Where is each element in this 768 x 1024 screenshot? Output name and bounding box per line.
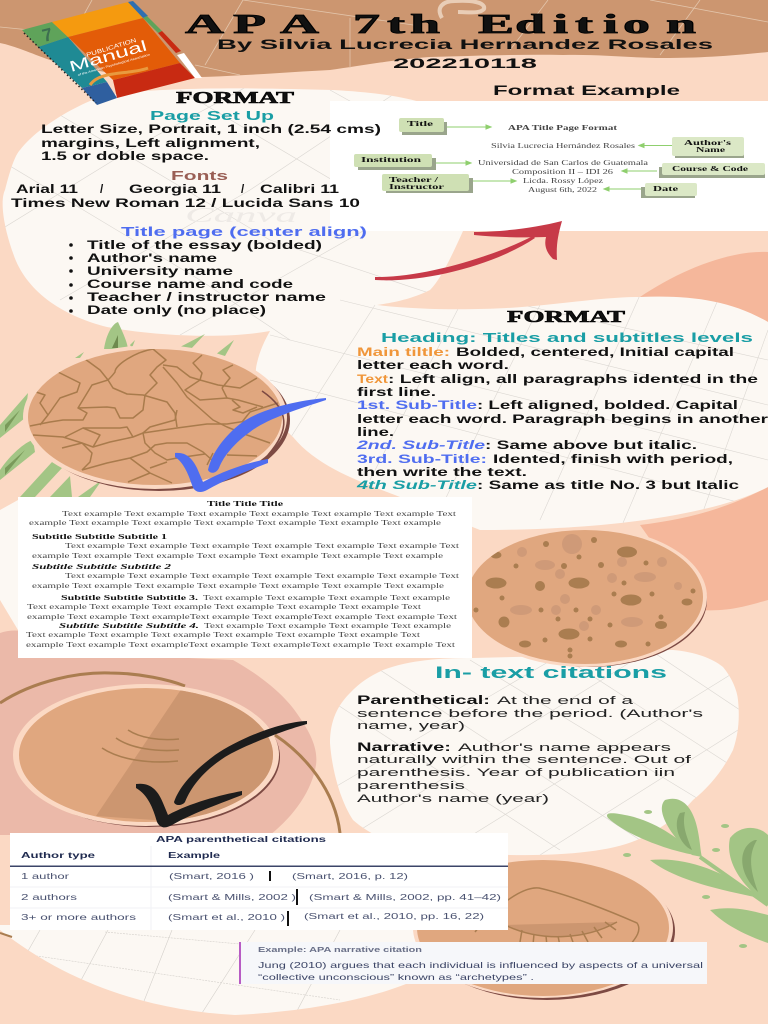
panel: sample paper format: example Text example Text exampleText example Text exampleText example Text example Text bbox=[26, 640, 456, 649]
pink shape lower left bbox=[0, 630, 316, 835]
heading: title page: Title page (center align) bbox=[121, 225, 367, 239]
text: page set up: Letter Size, Portrait, 1 inch (2.54 cms) bbox=[41, 123, 381, 136]
heading: in-text citations: In- text citations bbox=[435, 663, 667, 682]
text: first subtitle: letter each word. Paragraph begins in another bbox=[357, 413, 768, 426]
text: page set up bbox=[41, 123, 381, 163]
table: APA parenthetical citations: (Smart et al., 2010, pp. 16, 22) bbox=[304, 911, 484, 921]
leaves behind cracked disc bbox=[0, 322, 234, 497]
tag: title bbox=[399, 118, 447, 135]
callout: APA narrative citation: Jung (2010) argues that each individual is influenced by aspects of a universal bbox=[258, 960, 703, 970]
panel: sample paper format: example Text example Text example Text example Text example Text example Text example bbox=[32, 581, 445, 590]
table: APA parenthetical citations: (Smart et al., 2010 ) bbox=[168, 912, 285, 922]
text: main title: Bolded, centered, Initial capital bbox=[456, 346, 734, 359]
text: parenthetical bbox=[357, 694, 704, 732]
tag: course and code bbox=[659, 163, 765, 178]
text: page set up: margins, Left alignment, bbox=[41, 137, 260, 150]
text: fourth subtitle: 4th Sub-Title bbox=[355, 479, 478, 492]
text: first subtitle bbox=[357, 399, 768, 439]
panel: sample paper format: Subtitle Subtitle Subtitle 2 bbox=[32, 562, 172, 571]
brown curve behind lower disc bbox=[0, 673, 340, 833]
text: fonts: Arial 11 bbox=[16, 183, 79, 196]
tag: course and code: Course & Code bbox=[672, 166, 748, 173]
table: APA parenthetical citations: (Smart & Mills, 2002 ) bbox=[168, 892, 296, 902]
tag: teacher / instructor: Teacher / bbox=[389, 177, 438, 184]
disc: dotted texture bbox=[463, 527, 707, 667]
text: fonts: Times New Roman 12 / Lucida Sans 10 bbox=[11, 197, 360, 210]
panel: sample paper format: Text example Text example Text example Text example Text example Text example Text bbox=[65, 541, 460, 550]
watermark: Canva bbox=[185, 203, 297, 227]
text: fonts: / bbox=[100, 183, 104, 196]
disc: lower left bbox=[13, 684, 300, 830]
panel: sample paper format: Text example Text example Text example Text example Text example Text example Text bbox=[27, 602, 422, 611]
text: narrative: Author's name (year) bbox=[357, 793, 550, 805]
cream blob in-text citations bbox=[330, 650, 740, 855]
text: fonts: / bbox=[241, 183, 245, 196]
text: narrative: parenthesis bbox=[357, 780, 466, 792]
callout: APA narrative citation: Example: APA narrative citation bbox=[258, 945, 423, 954]
text: first subtitle: line. bbox=[357, 426, 394, 439]
heading: titles and subtitles levels: Heading: Titles and subtitles levels bbox=[381, 330, 753, 345]
heading: fonts: Fonts bbox=[171, 169, 228, 183]
text: parenthetical: At the end of a bbox=[497, 695, 634, 707]
text: narrative bbox=[357, 741, 693, 805]
text: body text bbox=[357, 373, 759, 399]
panel: sample paper format: example Text example Text example Text example Text example Text example Text example bbox=[32, 551, 444, 560]
sample title page text: Licda. Rossy López bbox=[523, 177, 603, 185]
format example heading: Format Example bbox=[493, 83, 681, 98]
panel: sample paper format: Title Title Title bbox=[207, 499, 284, 508]
tag: author's name bbox=[672, 137, 744, 158]
text: narrative: parenthesis. Year of publication iin bbox=[357, 767, 675, 779]
tag: date: Date bbox=[653, 186, 678, 193]
text: third subtitle: Idented, finish with period, bbox=[493, 453, 733, 466]
panel: format right bbox=[355, 307, 768, 492]
cream blob lower bbox=[0, 925, 416, 1015]
tag: author's name: Name bbox=[696, 147, 725, 154]
bullet list: title page: Teacher / instructor name bbox=[87, 291, 327, 304]
top brown band bbox=[0, 0, 768, 78]
text: fonts: Calibri 11 bbox=[260, 183, 340, 196]
text: second subtitle: 2nd. Sub-Title bbox=[355, 439, 486, 452]
cream blob upper bbox=[0, 85, 768, 530]
heading: format: FORMAT bbox=[176, 88, 295, 107]
sample title page text bbox=[478, 124, 649, 194]
table: APA parenthetical citations: (Smart, 2016, p. 12) bbox=[292, 871, 408, 881]
disc: cracked earth bbox=[23, 345, 290, 491]
tag: title: Title bbox=[407, 121, 433, 128]
panel: sample paper format: Subtitle Subtitle Subtitle 1 bbox=[32, 532, 167, 541]
icon: APA publication manual book: Manual bbox=[67, 37, 149, 76]
table: APA parenthetical citations: (Smart, 2016 ) bbox=[169, 871, 254, 881]
table: APA parenthetical citations: Author type bbox=[21, 850, 95, 860]
callout: APA narrative citation bbox=[239, 942, 707, 984]
table: APA parenthetical citations: Example bbox=[168, 850, 220, 860]
sample title page text: Universidad de San Carlos de Guatemala bbox=[478, 159, 649, 167]
panel: sample paper format: Subtitle Subtitle Subtitle 4. bbox=[59, 621, 199, 630]
brown mark at lower left bbox=[0, 933, 12, 937]
bullet list: title page: Title of the essay (bolded) bbox=[87, 239, 322, 252]
panel: sample paper format: Text example Text example Text example Text example bbox=[203, 593, 451, 602]
black check mark bbox=[136, 721, 307, 827]
icon: APA publication manual book bbox=[22, 1, 202, 105]
arrows bbox=[436, 125, 672, 191]
panel: sample paper format: example Text example Text example Text example Text example Text example Text example bbox=[29, 518, 442, 527]
text: body text: : Left align, all paragraphs idented in the bbox=[388, 373, 759, 386]
text: third subtitle: 3rd. Sub-Title: bbox=[357, 453, 487, 466]
bullet list: title page: Author's name bbox=[87, 252, 218, 265]
bullet list: title page: Date only (no place) bbox=[87, 304, 266, 317]
red arrow bbox=[375, 221, 562, 280]
author name: By Silvia Lucrecia Hernandez Rosales bbox=[217, 36, 713, 52]
panel: sample paper format: Text example Text example Text example Text example bbox=[204, 621, 452, 630]
text: page set up: 1.5 or doble space. bbox=[41, 150, 209, 163]
icon: APA publication manual book: of the American Psychological Association bbox=[77, 52, 151, 77]
text: narrative: Narrative: bbox=[357, 741, 451, 754]
panel: format left bbox=[11, 88, 381, 317]
text: second subtitle: : Same above but italic. bbox=[485, 439, 697, 452]
bullet list: title page: Course name and code bbox=[87, 278, 294, 291]
table: APA parenthetical citations: 3+ or more authors bbox=[21, 912, 136, 922]
tag: author's name: Author's bbox=[684, 140, 732, 147]
table: APA parenthetical citations: (Smart & Mills, 2002, pp. 41–42) bbox=[309, 892, 501, 902]
panel: sample paper format: Text example Text example Text example Text example Text example Text example Text bbox=[26, 630, 421, 639]
sample title page text: APA Title Page Format bbox=[508, 124, 618, 132]
salmon shape right bbox=[640, 487, 768, 610]
heading: format: FORMAT bbox=[507, 307, 626, 326]
panel: sample paper format: Subtitle Subtitle Subtitle 3. bbox=[61, 593, 198, 602]
text: fonts bbox=[11, 183, 360, 210]
panel: sample paper format: Text example Text example Text example Text example Text example Text example Text bbox=[62, 509, 457, 518]
salmon shape top right bbox=[640, 252, 768, 322]
text: first subtitle: 1st. Sub-Title bbox=[357, 399, 478, 412]
bullet list: title page: University name bbox=[87, 265, 234, 278]
text: third subtitle: then write the text. bbox=[357, 466, 527, 479]
sample title page text: Silvia Lucrecia Hernández Rosales bbox=[491, 142, 635, 150]
leaves bottom right bbox=[607, 799, 768, 948]
disc: lower right with eye bbox=[413, 858, 675, 1000]
cream sliver left edge bbox=[0, 500, 18, 630]
icon: APA publication manual book: PUBLICATION bbox=[86, 38, 137, 59]
tag: institution: Institution bbox=[361, 157, 421, 164]
table: APA parenthetical citations: APA parenthetical citations bbox=[156, 834, 326, 844]
text: third subtitle bbox=[357, 453, 733, 479]
panel: sample paper format bbox=[18, 497, 472, 658]
text: main title bbox=[357, 346, 734, 372]
table: APA parenthetical citations: 1 author bbox=[21, 871, 69, 881]
tag: institution bbox=[354, 154, 436, 170]
icon: APA publication manual book: 7 bbox=[40, 24, 55, 46]
tag: teacher / instructor: Instructor bbox=[389, 184, 444, 191]
text: first subtitle: : Left aligned, bolded. Capital bbox=[477, 399, 738, 412]
text: body text: Text bbox=[357, 373, 388, 386]
table: APA parenthetical citations: 2 authors bbox=[21, 892, 77, 902]
text: body text: first line. bbox=[357, 386, 436, 399]
tag: date bbox=[641, 183, 697, 198]
title: APA 7th Edition bbox=[185, 10, 696, 39]
panel: sample paper format: Text example Text example Text example Text example Text example Text example Text bbox=[65, 571, 460, 580]
blue check mark bbox=[175, 398, 326, 492]
text: narrative: Author's name appears bbox=[458, 742, 672, 754]
text: fourth subtitle: : Same as title No. 3 but Italic bbox=[477, 479, 740, 492]
callout: APA narrative citation: “collective unconscious” known as “archetypes” . bbox=[258, 972, 534, 982]
text: main title: letter each word. bbox=[357, 359, 509, 372]
panel: in-text citations bbox=[357, 663, 704, 805]
heading: page set up: Page Set Up bbox=[150, 109, 275, 123]
text: main title: Main tiltle: bbox=[357, 346, 450, 359]
bullet list: title page bbox=[69, 239, 327, 317]
text: fourth subtitle bbox=[355, 479, 740, 492]
sample title page text: August 6th, 2022 bbox=[528, 186, 598, 194]
text: parenthetical: Parenthetical: bbox=[357, 694, 490, 707]
panel: sample paper format: example Text example Text exampleText example Text exampleText example Text example Text bbox=[27, 612, 458, 621]
student id: 202210118 bbox=[393, 55, 537, 71]
table: APA parenthetical citations bbox=[10, 833, 508, 930]
tag: teacher / instructor bbox=[382, 174, 473, 193]
text: second subtitle bbox=[355, 439, 697, 452]
sample title page text: Composition II – IDI 26 bbox=[512, 168, 614, 176]
panel: format example bbox=[330, 101, 768, 231]
text: parenthetical: name, year) bbox=[357, 720, 465, 732]
text: narrative: naturally within the sentence. Out of bbox=[357, 754, 693, 766]
text: fonts: Georgia 11 bbox=[129, 183, 222, 196]
text: parenthetical: sentence before the period. (Author's bbox=[357, 708, 704, 720]
